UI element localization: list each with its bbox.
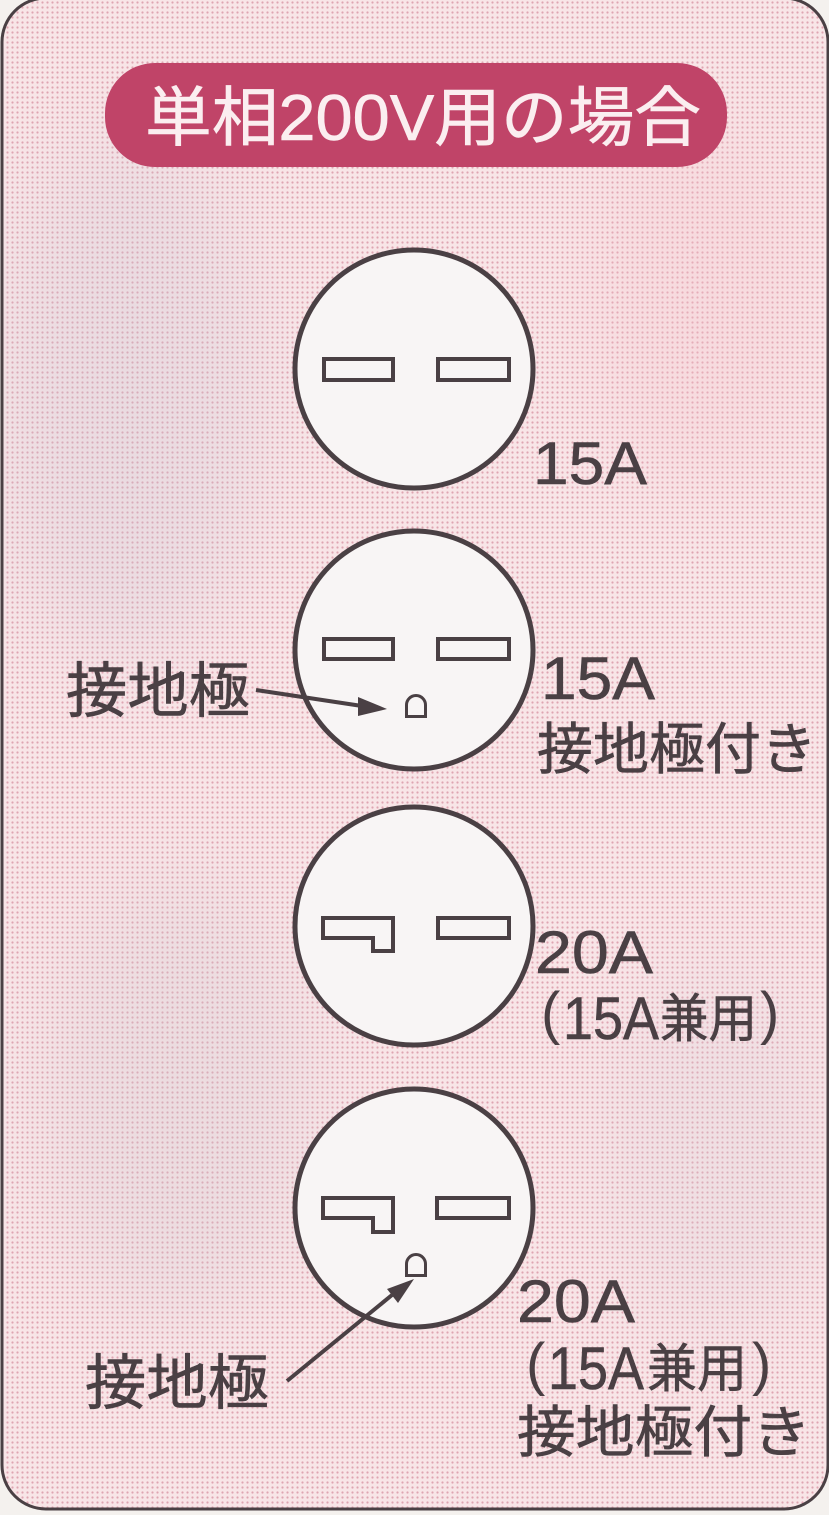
outlet: 15A	[295, 250, 533, 488]
title banner	[105, 63, 727, 167]
outlet: 15A with ground	[295, 531, 533, 769]
title banner: 単相200V用の場合	[145, 81, 701, 154]
label: 20A dual use: 兼用	[660, 991, 757, 1049]
label: 20A dual use grounded: 20A	[517, 1268, 635, 1335]
label: 15A: 15A	[533, 430, 647, 497]
label: 20A dual use grounded: 接地極付き	[517, 1401, 811, 1464]
label: 20A dual use: 20A	[535, 919, 653, 986]
label: 20A dual use grounded: 15A	[548, 1335, 644, 1402]
label: 20A dual use: 15A	[563, 985, 659, 1052]
label: 20A dual use grounded: )	[752, 1332, 771, 1397]
label: 15A grounded	[537, 645, 817, 781]
label: 15A grounded: 接地極付き	[537, 718, 817, 781]
label: 20A dual use: )	[760, 981, 779, 1046]
arrow: to lower ground pole	[287, 1279, 414, 1381]
outlet: 20A	[295, 807, 533, 1045]
label: 20A dual use grounded: 兼用	[647, 1341, 747, 1399]
label: 20A dual use grounded: (	[526, 1332, 545, 1397]
label: ground pole: 接地極	[66, 658, 250, 725]
label: 15A grounded: 15A	[541, 645, 655, 712]
label: 20A dual use grounded	[517, 1268, 811, 1464]
label: ground pole lower: 接地極	[85, 1350, 269, 1417]
label: 20A dual use	[535, 919, 779, 1052]
outlet: 20A with ground	[295, 1089, 533, 1327]
label: 20A dual use: (	[541, 981, 560, 1046]
arrow: to ground pole	[256, 690, 387, 716]
